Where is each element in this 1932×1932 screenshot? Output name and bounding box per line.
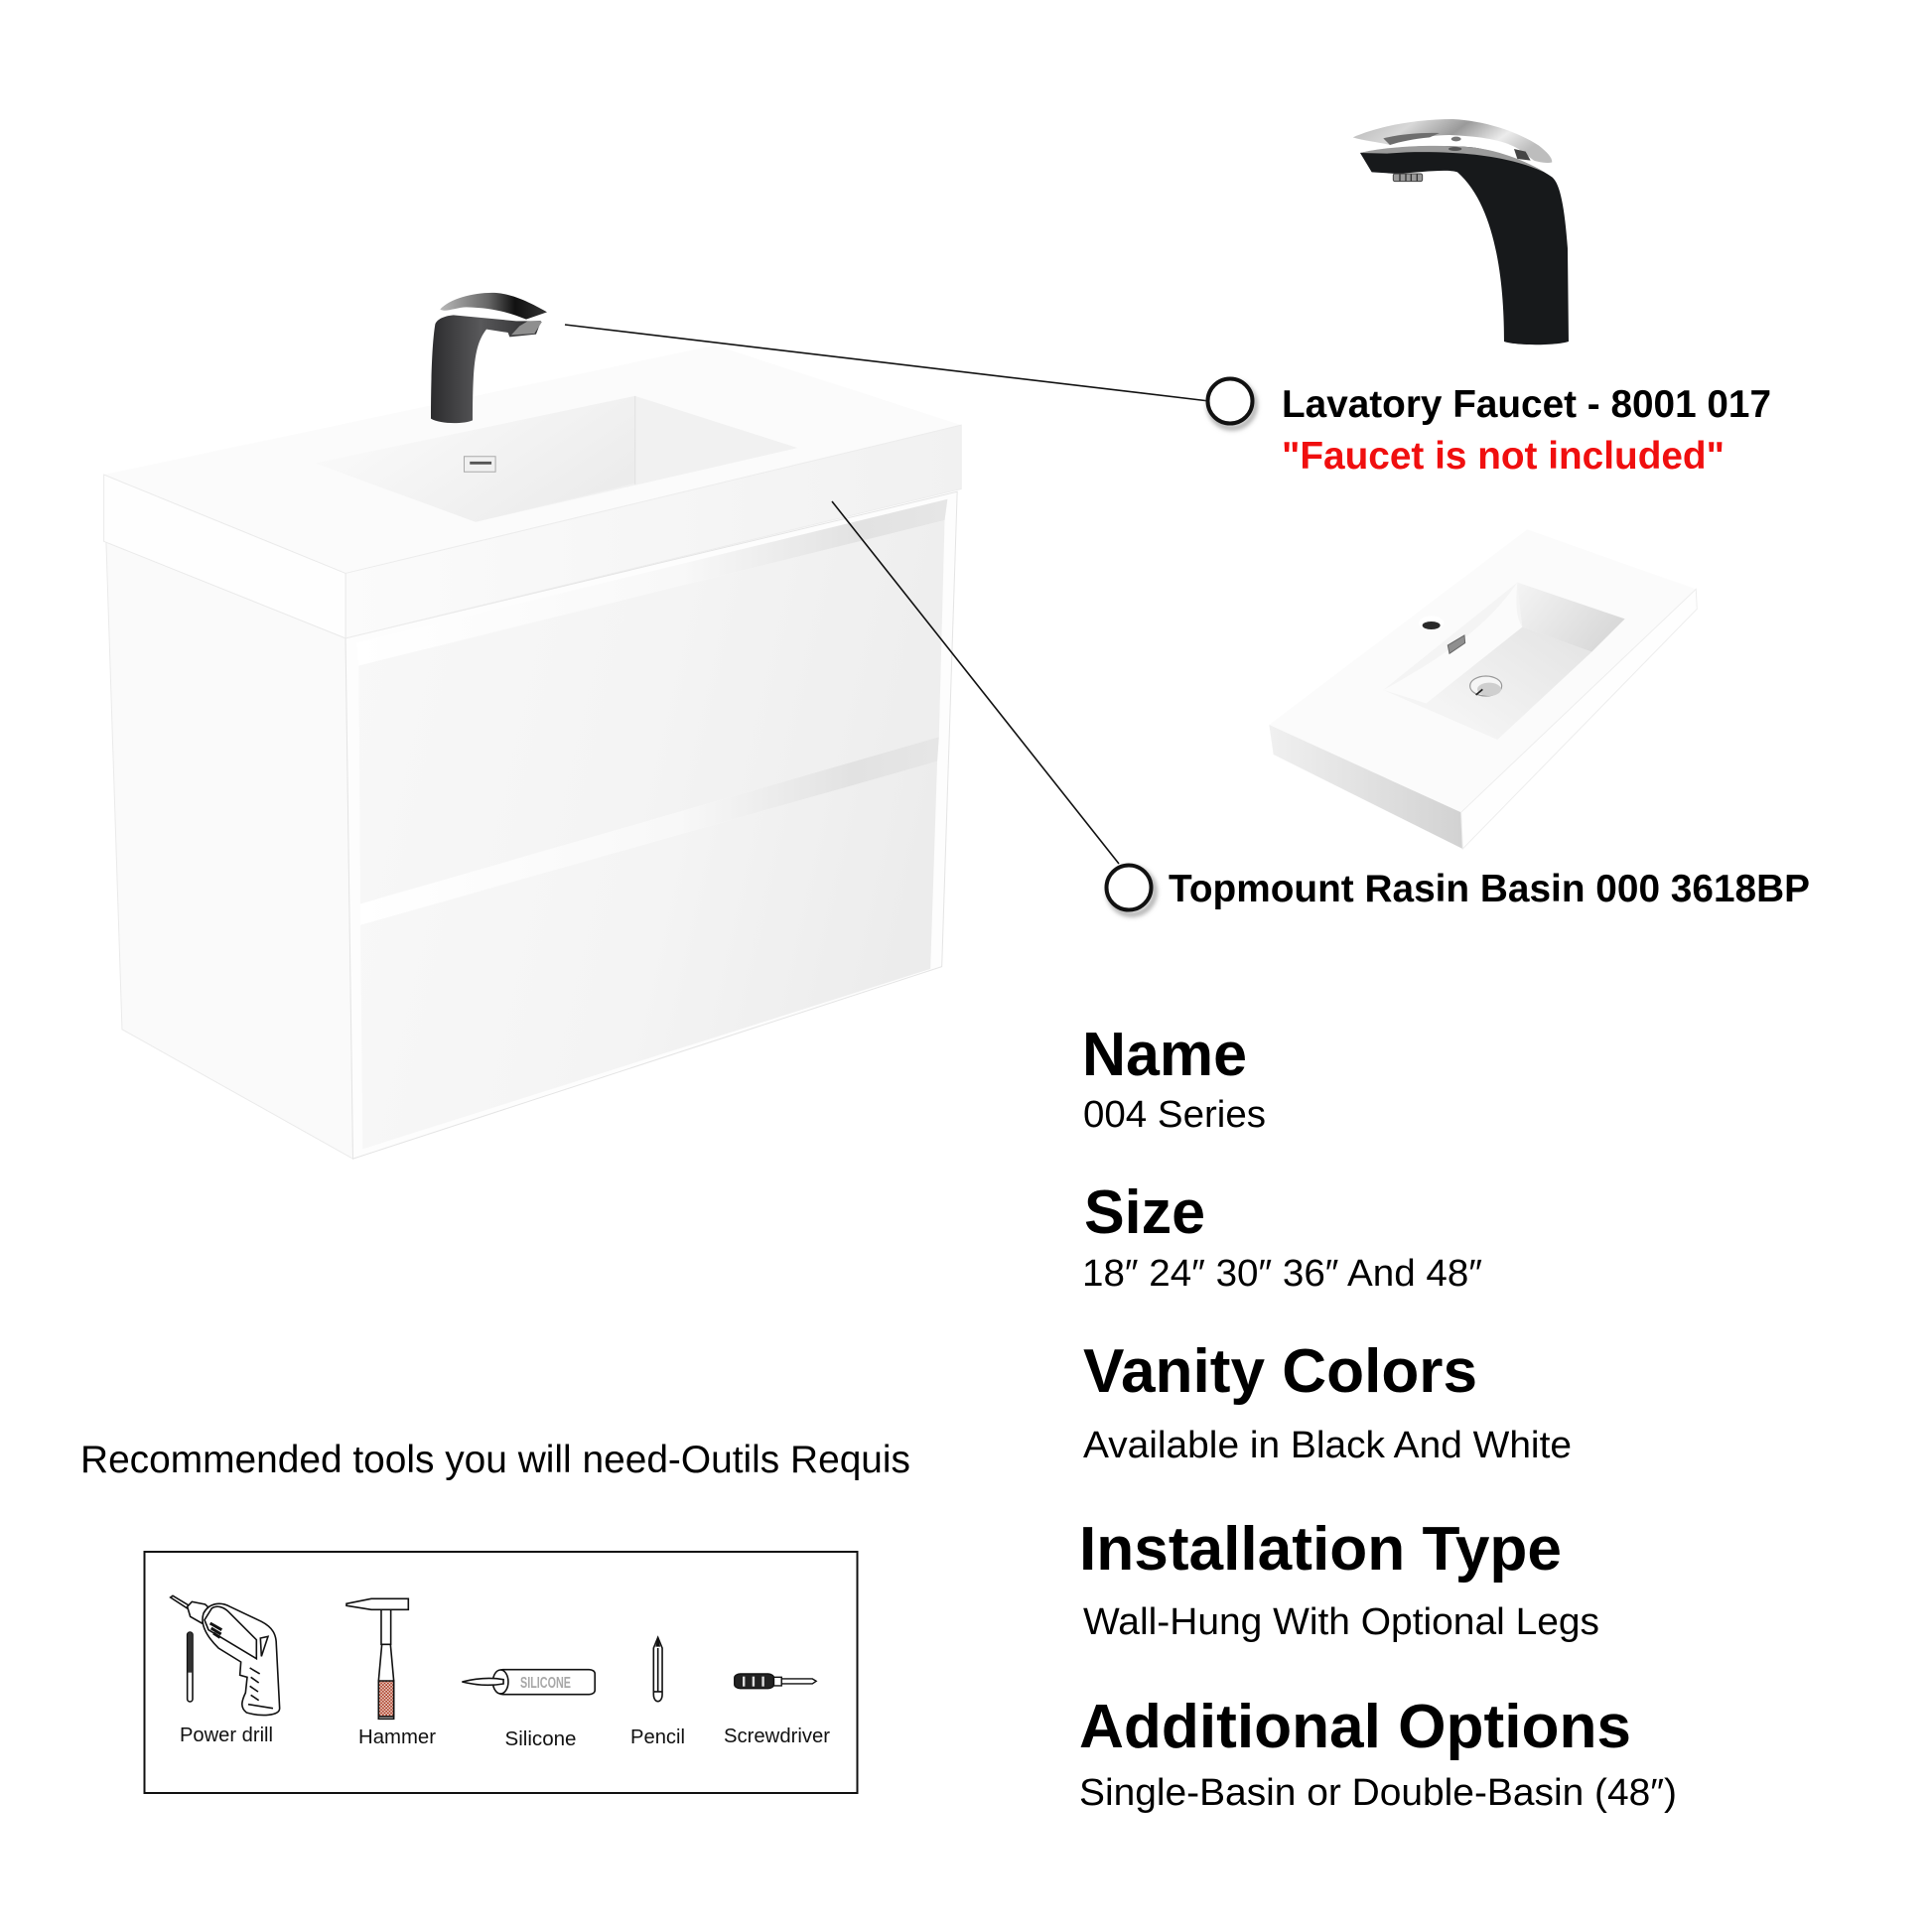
overflow fitting [464,457,495,472]
spec: additional options: Additional Options [1079,1693,1631,1761]
spec: name: Name [1082,1021,1247,1089]
icon: hammer [346,1598,408,1719]
faucet black body [1360,146,1569,345]
spec: vanity colors [1083,1337,1572,1466]
spec: additional options [1079,1693,1677,1814]
upper drawer [358,520,945,903]
cabinet left side [106,541,353,1159]
icon: pencil [653,1637,662,1702]
tool labels: Power drill [180,1725,273,1746]
icon: screwdriver [735,1674,816,1689]
tool labels: Hammer [358,1726,436,1748]
drain [1470,676,1502,696]
leader line to faucet [565,325,1209,401]
marker circle [1106,866,1155,914]
spec: installation type: Wall-Hung With Optional Legs [1083,1601,1599,1643]
spout chrome strip [1360,146,1544,172]
lower drawer [360,761,937,1149]
faucet spout chrome [511,321,542,335]
panel border [145,1552,858,1793]
basin front face [1269,725,1462,849]
specification list [1079,1021,1677,1814]
upper groove [357,499,947,665]
vanity cabinet [104,345,961,1159]
spec: additional options: Single-Basin or Double-Basin (48″) [1079,1772,1677,1814]
spec: vanity colors: Vanity Colors [1083,1337,1477,1406]
large faucet product image [1353,119,1569,345]
spec: installation type [1079,1515,1599,1643]
overflow slot [1448,635,1465,653]
spec: name [1082,1021,1266,1136]
faucet label: Lavatory Faucet - 8001 017 [1282,383,1771,426]
icon: silicone tube [462,1670,595,1695]
spec: installation type: Installation Type [1079,1515,1562,1584]
faucet handle [440,293,547,320]
basin product image [1269,529,1697,849]
tap hole [1419,616,1444,630]
slab front edge [345,425,961,638]
marker circle [1207,379,1255,428]
tool labels [180,1725,830,1750]
spec: size: 18″ 24″ 30″ 36″ And 48″ [1082,1253,1482,1295]
leader line to basin [832,501,1119,864]
icon: power drill [171,1595,280,1716]
tool labels: Pencil [630,1726,685,1748]
lower groove [360,737,939,925]
callout: lavatory faucet [1207,379,1771,478]
tool labels: Screwdriver [724,1725,830,1747]
callout: topmount basin [1106,866,1810,914]
sink bowl [316,396,797,522]
aerator [1393,174,1423,182]
cabinet front frame [345,491,957,1159]
basin right face [1461,589,1697,849]
tools heading: Recommended tools you will need-Outils Requis [80,1439,910,1481]
faucet body [431,315,541,423]
spec: size [1082,1178,1482,1295]
basin top face [1269,529,1696,812]
bowl [1383,583,1625,740]
slab left edge [104,475,345,638]
spec: vanity colors: Available in Black And White [1083,1425,1572,1466]
spec: name: 004 Series [1083,1094,1266,1136]
not included note: "Faucet is not included" [1282,435,1725,478]
tools panel [145,1552,858,1793]
spec: size: Size [1084,1178,1205,1247]
basin top slab [104,345,961,573]
chrome handle [1353,119,1552,163]
basin label: Topmount Rasin Basin 000 3618BP [1169,868,1810,910]
tube label: SILICONE [520,1675,571,1692]
tool labels: Silicone [504,1728,576,1750]
small faucet on vanity [431,293,547,423]
